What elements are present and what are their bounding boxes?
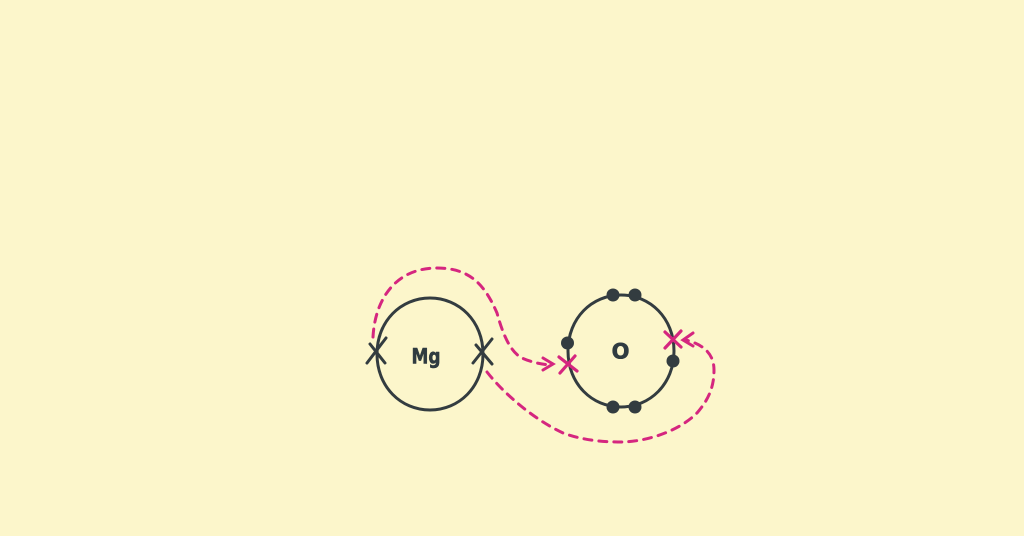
magnesium atom xyxy=(367,298,492,410)
O electron shell xyxy=(568,295,674,407)
Mg electron shell xyxy=(377,298,483,410)
Mg left electron cross xyxy=(367,338,386,363)
O electron dots xyxy=(561,288,680,414)
arrow: Mg right electron to O xyxy=(487,333,714,442)
O label: O xyxy=(612,340,629,364)
Mg label: Mg xyxy=(412,344,440,368)
O right transferred electron cross xyxy=(665,331,681,348)
arrow: Mg left electron to O xyxy=(373,268,553,370)
O left transferred electron cross xyxy=(559,356,577,373)
Mg right electron cross xyxy=(473,339,492,364)
oxygen atom xyxy=(559,288,681,414)
